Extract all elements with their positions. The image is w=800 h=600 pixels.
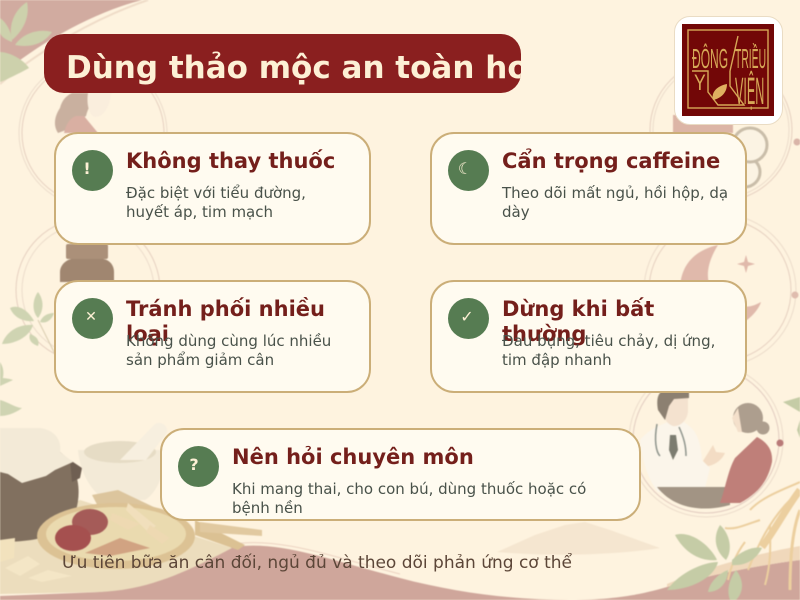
- heading: Cẩn trọng caffeine: [502, 149, 720, 173]
- description: Không dùng cùng lúc nhiều sản phẩm giảm cân: [126, 332, 331, 368]
- bottom wave: [0, 543, 800, 600]
- top-left swoosh: [0, 0, 148, 84]
- icon: cross: ✕: [85, 309, 97, 325]
- mortar and pestle: [78, 423, 167, 500]
- crescent moon: [644, 214, 798, 366]
- herb mat: [0, 500, 232, 594]
- logo: [674, 16, 783, 125]
- circle: bottle: [16, 218, 160, 362]
- icon: check: ✓: [460, 307, 474, 326]
- icon: exclamation: !: [83, 159, 91, 178]
- description: Khi mang thai, cho con bú, dùng thuốc hoặc có bệnh nền: [232, 480, 586, 516]
- logo: VIỆN: [735, 69, 764, 112]
- icon: question: ?: [189, 455, 199, 474]
- icon: question: [178, 446, 219, 487]
- jar: [0, 428, 82, 542]
- herb tray: [0, 490, 262, 582]
- logo: TRIỀU: [735, 44, 766, 75]
- card: không thay thuốc: [54, 132, 371, 245]
- card: nên hỏi chuyên môn: [160, 428, 641, 521]
- icon: moon: [448, 150, 489, 191]
- logo: ĐÔNG: [692, 42, 728, 74]
- icon: moon: ☾: [458, 159, 472, 178]
- ginseng leaves: [667, 397, 800, 600]
- card: dừng khi bất thường: [430, 280, 747, 393]
- description: Đau bụng, tiêu chảy, dị ứng, tim đập nhanh: [502, 332, 715, 368]
- clock and circle top right: [650, 59, 800, 201]
- icon: check: [448, 298, 489, 339]
- description: Đặc biệt với tiểu đường, huyết áp, tim mạch: [126, 184, 306, 220]
- card: cẩn trọng caffeine: [430, 132, 747, 245]
- heading: Dừng khi bất thường: [502, 297, 654, 346]
- card: tránh phối nhiều loại: [54, 280, 371, 393]
- icon: cross: [72, 298, 113, 339]
- logo: Y: [694, 71, 706, 96]
- heading: Nên hỏi chuyên môn: [232, 445, 474, 469]
- top-left leaves: [0, 2, 52, 82]
- heading: Không thay thuốc: [126, 149, 335, 173]
- heading: Tránh phối nhiều loại: [126, 297, 325, 346]
- footer note: Ưu tiên bữa ăn cân đối, ngủ đủ và theo dõi phản ứng cơ thể: [62, 553, 572, 573]
- branch leaves left: [0, 292, 55, 416]
- ginseng root: [725, 482, 800, 590]
- doctor and patient: [629, 363, 784, 517]
- circle: pregnant woman: [19, 59, 167, 207]
- description: Theo dõi mất ngủ, hồi hộp, dạ dày: [502, 184, 728, 220]
- mountains: [497, 522, 660, 555]
- title banner: [44, 34, 521, 93]
- icon: exclamation: [72, 150, 113, 191]
